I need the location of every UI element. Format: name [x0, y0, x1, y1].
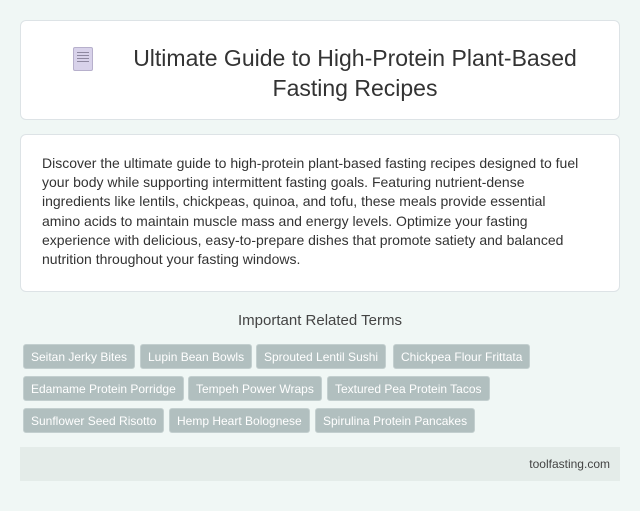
tag	[23, 376, 184, 401]
tag	[315, 408, 475, 433]
title: Ultimate Guide to High-Protein Plant-Based Fasting Recipes	[133, 45, 577, 101]
tag	[256, 344, 386, 369]
tag: Textured Pea Protein Tacos	[335, 382, 482, 396]
tag	[140, 344, 252, 369]
heading: related terms: Important Related Terms	[238, 312, 402, 329]
tag: Edamame Protein Porridge	[31, 382, 176, 396]
description text: Discover the ultimate guide to high-protein plant-based fasting recipes designed to fuel your body while supporting intermittent fasting goals. Featuring nutrient-dense ingredients like lentils, chickpeas, quinoa, and tofu, these meals provide essential amino acids to maintain muscle mass and energy levels. Optimize your fasting experience with delicious, easy-to-prepare dishes that promote satiety and balanced nutrition throughout your fasting windows.	[42, 155, 578, 267]
tag: Spirulina Protein Pancakes	[323, 414, 467, 428]
tag: Seitan Jerky Bites	[31, 350, 127, 364]
tag: Sprouted Lentil Sushi	[264, 350, 378, 364]
tag: Hemp Heart Bolognese	[177, 414, 302, 428]
footer text: toolfasting.com	[529, 457, 610, 471]
tag: Lupin Bean Bowls	[148, 350, 244, 364]
icon: document	[73, 47, 93, 71]
footer	[20, 447, 620, 481]
description card	[20, 134, 620, 292]
header card	[20, 20, 620, 120]
tag: Tempeh Power Wraps	[196, 382, 314, 396]
tag: Sunflower Seed Risotto	[31, 414, 156, 428]
tag	[23, 344, 135, 369]
tag: Chickpea Flour Frittata	[401, 350, 522, 364]
tag	[169, 408, 310, 433]
tag	[393, 344, 530, 369]
tag	[327, 376, 490, 401]
tag	[23, 408, 164, 433]
tag	[188, 376, 322, 401]
